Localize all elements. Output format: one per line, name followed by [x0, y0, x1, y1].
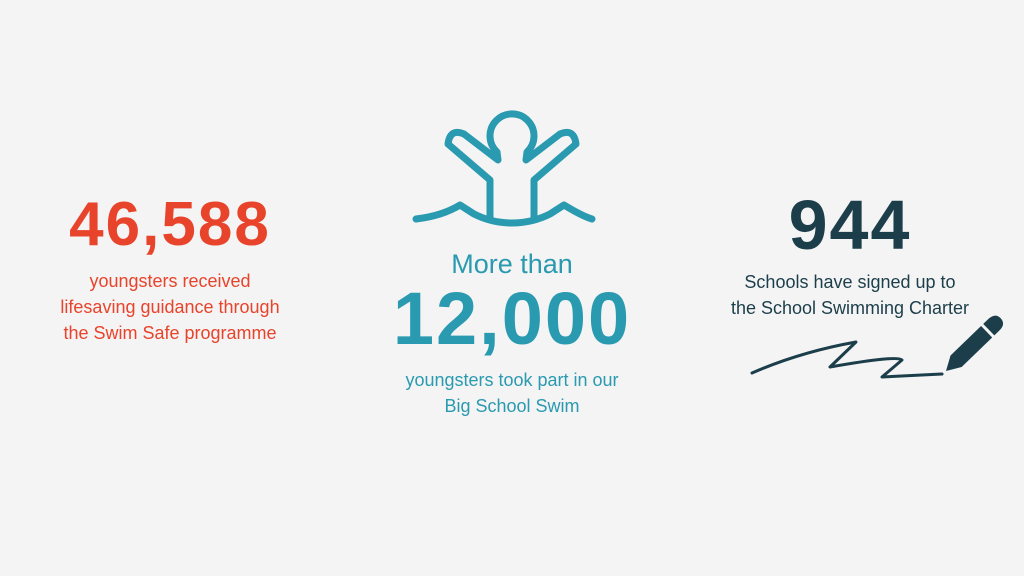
panel: big school swim stat	[393, 249, 631, 416]
text: big school swim description	[405, 370, 619, 416]
number: 46,588: 46,588	[69, 190, 271, 259]
number: 944: 944	[789, 186, 911, 264]
text: more than: More than	[451, 249, 573, 279]
text: swim safe description: youngsters received	[89, 271, 251, 291]
number: 12,000: 12,000	[393, 277, 631, 360]
panel: swim safe stat	[60, 190, 280, 343]
text: big school swim description: youngsters took part in our	[405, 370, 619, 390]
panel: school swimming charter stat	[731, 186, 969, 318]
text: swim safe description: the Swim Safe programme	[63, 323, 277, 343]
text: charter description: the School Swimming Charter	[731, 298, 969, 318]
text: big school swim description: Big School Swim	[444, 396, 580, 416]
text: charter description	[731, 272, 969, 318]
text: swim safe description	[60, 271, 280, 343]
text: swim safe description: lifesaving guidance through	[60, 297, 280, 317]
text: charter description: Schools have signed up to	[744, 272, 956, 292]
